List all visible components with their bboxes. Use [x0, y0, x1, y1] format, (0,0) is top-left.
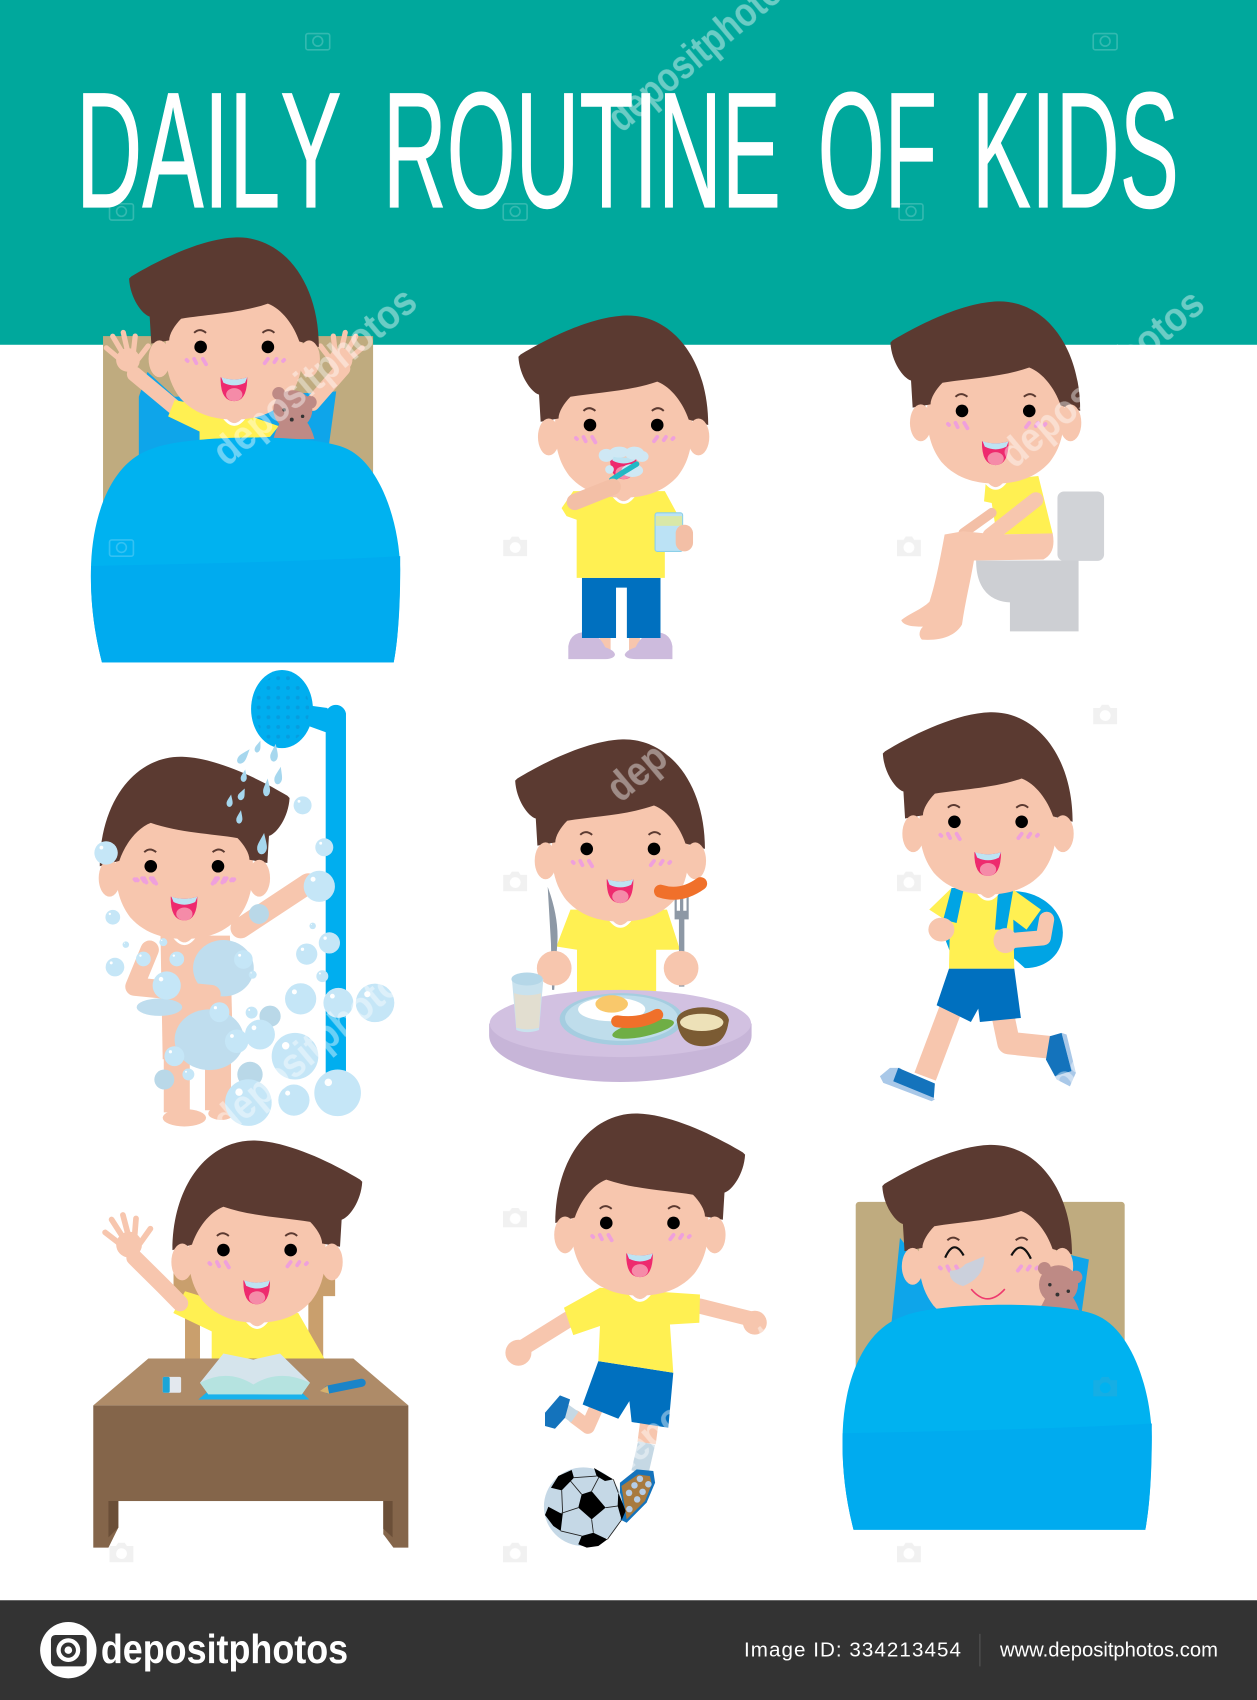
watermarks: depositphotos: [990, 279, 1213, 476]
headboard: [856, 1202, 1125, 1386]
blue pants: [582, 578, 660, 638]
scene: studying at a desk: [93, 1141, 408, 1548]
cleat shoe: [620, 1469, 655, 1523]
brushing hand: [575, 487, 613, 502]
foam: [599, 447, 649, 477]
lettuce: [611, 1015, 675, 1043]
toothbrush: [612, 464, 637, 480]
title banner: [0, 0, 1257, 345]
foam: [137, 940, 254, 1070]
blanket: [91, 437, 400, 662]
boy head: [554, 1113, 745, 1300]
right leg: [1003, 1017, 1050, 1047]
arms raised: [134, 369, 343, 407]
crossed arm: [134, 950, 211, 994]
watermarks: depositphotos: [597, 1288, 819, 1485]
chair: [174, 1271, 335, 1360]
hands: [537, 951, 698, 986]
torso: [161, 936, 233, 1059]
yellow shirt: [984, 476, 1053, 535]
arms and hands: [928, 918, 1047, 953]
boy head: [515, 739, 706, 926]
footer bar: [0, 1600, 1257, 1700]
backpack: [944, 891, 1063, 968]
toilet bowl: [976, 561, 1079, 631]
teddy bear: [1038, 1262, 1082, 1314]
scene: using the toilet: [890, 301, 1104, 640]
boy head: [518, 315, 709, 503]
left shoe: [545, 1395, 570, 1429]
image id: Image ID: 334213454: [744, 1639, 961, 1662]
watermarks: [203, 0, 1213, 1485]
face: [592, 1206, 690, 1277]
separator: [979, 1634, 980, 1666]
scene: eating breakfast: [489, 739, 752, 1082]
scene: taking a shower: [94, 670, 394, 1126]
backpack straps: [943, 888, 1013, 930]
boy head: [99, 757, 290, 944]
shower head: [251, 670, 313, 748]
scene: sleeping in bed: [842, 1145, 1152, 1530]
blanket: [842, 1305, 1152, 1530]
scene: waking up in bed: [91, 237, 400, 662]
knife: [548, 887, 558, 990]
scene: walking to school: [880, 712, 1076, 1101]
yellow shirt: [929, 888, 1041, 969]
blue shorts: [583, 1361, 673, 1428]
watermarks: depositphotos: [990, 949, 1213, 1146]
back arm: [963, 513, 992, 533]
yellow shirt: [564, 1288, 700, 1373]
raised arm: [241, 884, 308, 928]
raised arm: [134, 1258, 180, 1303]
glass of water: [655, 513, 683, 551]
eraser: [163, 1377, 181, 1393]
soup bowl: [677, 1007, 729, 1046]
open book: [198, 1353, 310, 1399]
glass of milk: [511, 973, 543, 1032]
pencil: [320, 1383, 362, 1394]
kicking leg: [564, 1407, 597, 1427]
face: [209, 1233, 307, 1304]
scene: brushing teeth: [518, 315, 709, 659]
watermarks: depositphotos: [597, 613, 819, 810]
left leg: [925, 1010, 950, 1077]
sausage on plate: [617, 1015, 657, 1022]
blue shorts: [937, 969, 1021, 1022]
fried egg: [578, 995, 645, 1021]
front arm: [990, 500, 1036, 536]
pillow: [892, 1238, 1089, 1323]
right arm: [700, 1306, 753, 1319]
watermarks: depositphotos: [203, 277, 425, 474]
watermark camera icons: [110, 34, 1117, 1562]
backpack lower left: [942, 930, 950, 952]
boy head: [883, 712, 1074, 899]
plate: [560, 993, 683, 1045]
desk: [93, 1358, 408, 1548]
boy head: [129, 237, 320, 424]
pillow: [139, 372, 336, 455]
arms: [520, 1319, 568, 1349]
legs: [600, 634, 640, 654]
snot bubble: [950, 1256, 984, 1286]
boy head: [171, 1141, 362, 1328]
shower pole: [304, 705, 346, 1073]
headboard: [103, 336, 373, 520]
water drops: [226, 740, 284, 855]
yellow shirt: [168, 400, 279, 440]
boy head: [890, 301, 1081, 488]
left shoe: [880, 1068, 935, 1101]
legs: [177, 1041, 218, 1112]
hand holding glass: [676, 525, 693, 551]
website url: www.depositphotos.com: [999, 1639, 1218, 1662]
legs and hip: [901, 531, 1053, 640]
watermarks: depositphotos: [203, 946, 425, 1143]
yellow shirt: [173, 1291, 324, 1358]
boy head sleeping: [882, 1145, 1073, 1332]
title: DAILY: [76, 58, 342, 242]
title: OF: [818, 58, 937, 242]
yellow shirt: [562, 491, 677, 578]
soccer ball: [544, 1467, 626, 1548]
sausage on fork: [660, 884, 701, 893]
face details: [137, 849, 234, 920]
table: [489, 990, 752, 1082]
standing leg: [640, 1422, 649, 1472]
toilet tank: [1057, 491, 1104, 561]
waving hands: [103, 326, 365, 377]
right shoe: [1046, 1033, 1076, 1086]
teddy bear: [272, 387, 317, 439]
waving hand: [102, 1207, 158, 1263]
fists: [505, 1311, 767, 1366]
fork: [675, 894, 689, 987]
scene: playing football: [505, 1113, 767, 1548]
feet: [163, 1107, 234, 1126]
slippers: [568, 632, 672, 659]
yellow shirt: [556, 910, 680, 993]
logo icon: [40, 1622, 97, 1678]
title: ROUTINE: [383, 58, 781, 242]
soap bubbles: [94, 796, 394, 1126]
logo wordmark: depositphotos: [101, 1626, 348, 1672]
